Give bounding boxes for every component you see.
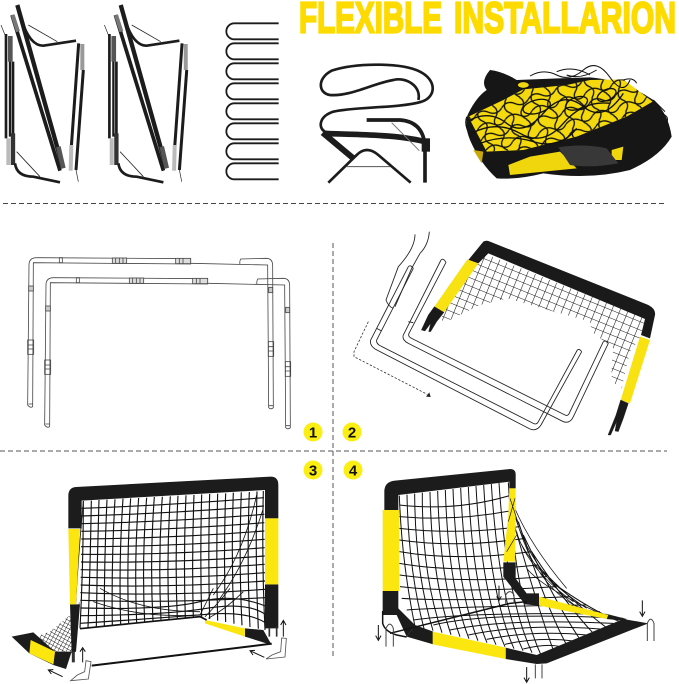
step number 3: 3 xyxy=(309,462,317,480)
step number 1 xyxy=(304,422,322,442)
step 2: net mesh xyxy=(442,256,644,388)
step 4: downward arrows xyxy=(376,586,645,682)
step 2: goal top bar xyxy=(468,241,655,338)
step 3: fallen left net xyxy=(39,602,80,652)
step 3: net mesh xyxy=(75,491,265,630)
step 3: left corner bracket xyxy=(71,661,91,681)
dashed dividers between steps xyxy=(0,243,667,657)
parts: folded frame poles, set two xyxy=(104,5,187,182)
title xyxy=(299,0,676,42)
parts: U-shaped ground pegs xyxy=(226,23,279,179)
step 4: yellow sleeves xyxy=(383,488,608,659)
step 4: goal frame black xyxy=(383,469,648,664)
step number 1: 1 xyxy=(309,424,317,442)
step 2: sliding frames into goal sleeves xyxy=(354,232,657,435)
step 4: ground bar and white inner corner xyxy=(383,602,527,637)
step 3: goal with net, inserting corner brackets xyxy=(12,477,286,681)
step 2: sleeve ends xyxy=(421,307,628,435)
step number 4 xyxy=(344,460,362,480)
step 4: rear post mesh over yellow xyxy=(507,498,527,552)
step 3: movement arrows xyxy=(48,620,286,677)
parts: folded frame poles, set one xyxy=(1,5,83,182)
top row: dashed divider xyxy=(3,202,667,204)
step 3: right corner bracket xyxy=(266,638,286,659)
step 2: direction arrow xyxy=(354,322,427,394)
step 2: yellow sleeves xyxy=(434,259,650,403)
parts: bundled net with yellow sleeves xyxy=(466,66,672,179)
step number 4: 4 xyxy=(349,462,358,480)
step 4: ground pegs xyxy=(386,592,654,678)
step number 2 xyxy=(342,422,362,442)
step 4: goal with net, pegged to ground xyxy=(376,469,654,682)
step number 2: 2 xyxy=(348,424,356,442)
step 3: bar and floor edge xyxy=(80,617,272,666)
step 2: frame tubes xyxy=(370,232,608,430)
step 3: yellow sleeves xyxy=(29,518,278,664)
step 3: goal frame black xyxy=(12,477,278,669)
step 1: two bare frames xyxy=(28,258,291,429)
step number 3 xyxy=(304,460,322,480)
step 4: net mesh xyxy=(399,482,623,655)
parts: strap and corner frame pieces xyxy=(321,65,433,183)
